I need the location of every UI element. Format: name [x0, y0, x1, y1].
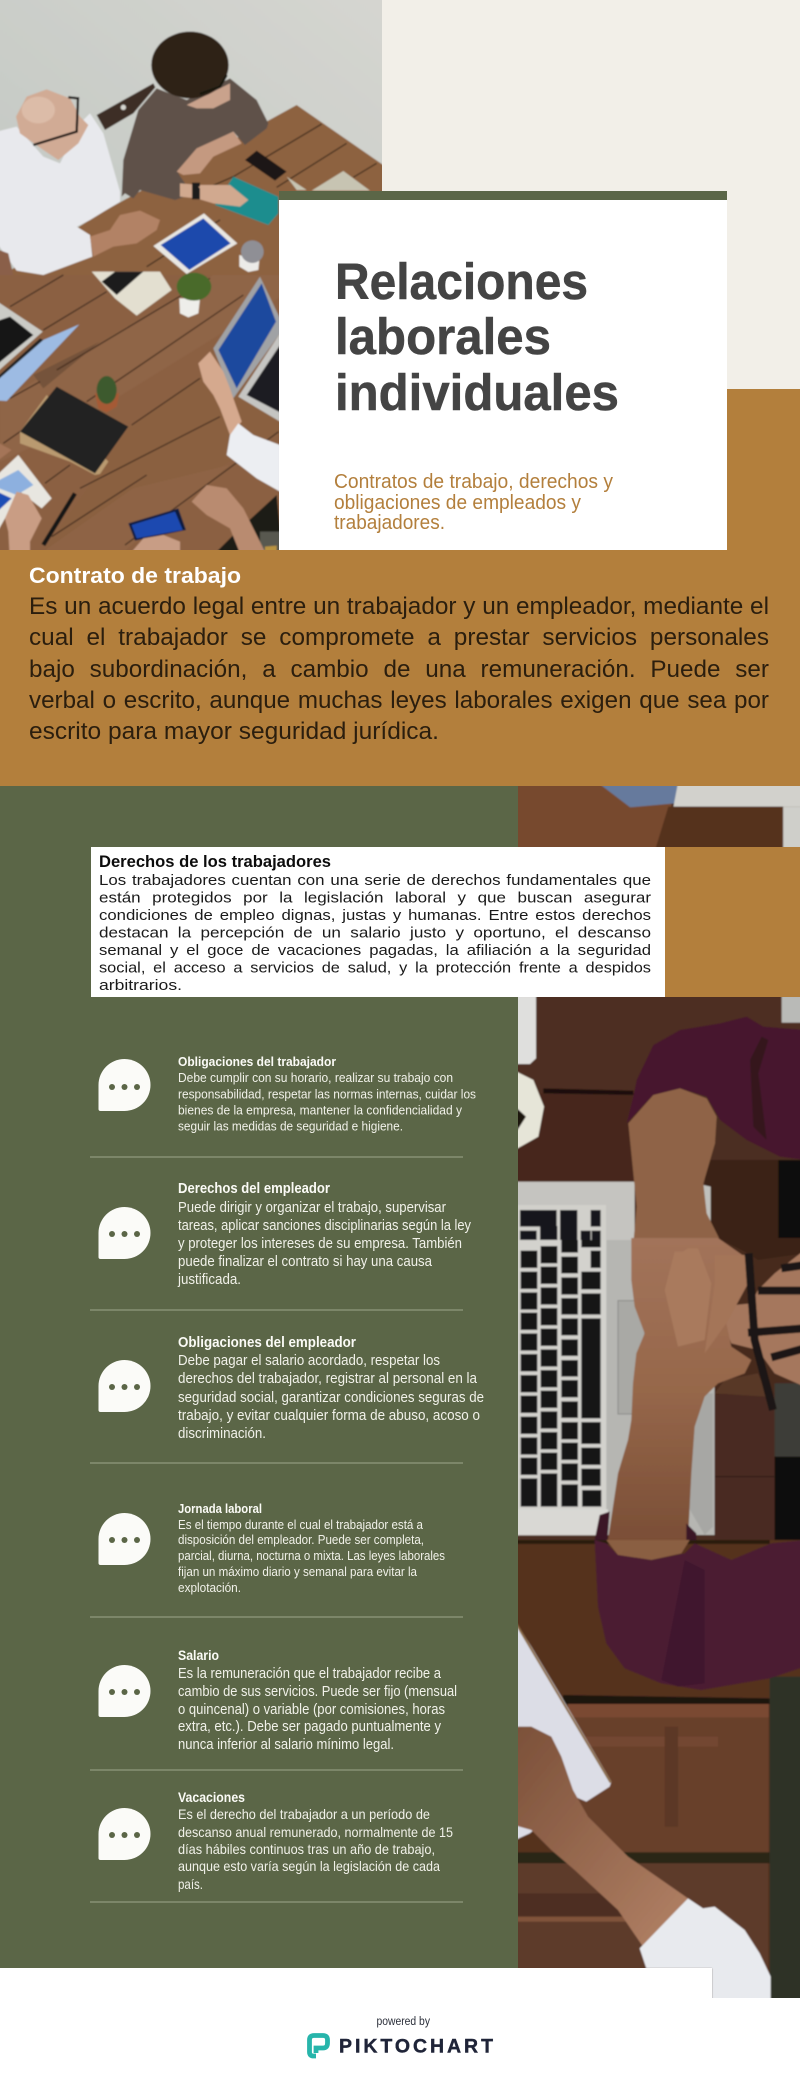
body text: responsabilidad, respetar las normas internas, cuidar los — [178, 1086, 476, 1102]
beige header panel — [382, 0, 800, 389]
sleeve cuffs — [595, 1512, 696, 1540]
icon: piktochart logo — [310, 2036, 328, 2056]
subtitle — [334, 471, 613, 534]
notebook with phone — [92, 272, 172, 316]
body text — [178, 1518, 445, 1595]
body text: días hábiles continuos tras un año de trabajo, — [178, 1841, 435, 1857]
icon: speech bubble — [98, 1207, 150, 1259]
title: Relaciones — [335, 253, 588, 310]
body text — [178, 1353, 484, 1442]
body text: discriminación. — [178, 1426, 266, 1442]
text block: contract definition: Es un acuerdo legal entre un trabajador y un empleador, mediante el — [29, 593, 769, 620]
body text: Debe cumplir con su horario, realizar su trabajo con — [178, 1070, 453, 1085]
body text: puede finalizar el contrato si hay una causa — [178, 1254, 433, 1270]
white footer panel — [0, 1968, 712, 2078]
heading: derechos de los trabajadores: Derechos de los trabajadores — [99, 853, 331, 871]
body text: derechos del trabajador, registrar al personal en la — [178, 1371, 478, 1387]
text block: rights description — [99, 872, 651, 994]
body text: Puede dirigir y organizar el trabajo, supervisar — [178, 1200, 446, 1216]
body text: tareas, aplicar sanciones disciplinarias según la ley — [178, 1218, 472, 1234]
body text: país. — [178, 1876, 203, 1892]
laptop top right — [287, 171, 370, 191]
panel: derechos de los trabajadores — [91, 847, 665, 997]
body text — [178, 1070, 476, 1134]
title: laborales — [335, 308, 551, 365]
photo: handshake over laptop on wooden desk — [500, 770, 800, 2015]
body text: justificada. — [177, 1272, 241, 1288]
icon: speech bubble — [98, 1513, 150, 1565]
body text: descanso anual remunerado, normalmente de 15 — [178, 1824, 453, 1840]
heading: Derechos del empleador — [178, 1181, 330, 1197]
teal notebook — [215, 177, 278, 225]
body text: explotación. — [178, 1581, 241, 1595]
dark floor and hand bottom right — [192, 484, 279, 550]
second person's face and hand — [725, 1250, 800, 1387]
subtitle: trabajadores. — [334, 512, 445, 534]
woman in brown shirt — [122, 32, 268, 207]
body text: aunque esto varía según la legislación de cada — [178, 1858, 440, 1874]
paper at top — [518, 997, 538, 1066]
plant in white pot — [177, 273, 211, 317]
item: obligaciones del trabajador — [98, 1054, 476, 1134]
arm with white sleeve — [198, 352, 280, 492]
text block: rights description: social, el acceso a servicios de salud, y la protección frente a despidos — [99, 960, 651, 976]
heading: contrato de trabajo: Contrato de trabajo — [29, 563, 241, 588]
white cuff — [640, 1898, 771, 2007]
heading: Obligaciones del empleador — [178, 1335, 356, 1351]
tablet and hands bottom left — [0, 444, 52, 550]
body text: parcial, diurna, nocturna o mixta. Las leyes laborales — [178, 1549, 445, 1563]
body text: nunca inferior al salario mínimo legal. — [178, 1737, 394, 1753]
heading: Jornada laboral — [178, 1502, 262, 1516]
footer: powered by piktochart — [310, 2016, 493, 2058]
maroon sleeve — [595, 1540, 800, 1690]
text block: rights description: están protegidos por la legislación laboral y que buscan asegurar — [99, 890, 651, 906]
photo: team meeting around wooden table — [0, 0, 400, 562]
title card — [279, 200, 727, 550]
wood and dark right side — [715, 1238, 800, 1540]
notebook — [508, 1610, 611, 1843]
front hand and forearm — [608, 1238, 751, 1540]
heading: Obligaciones del trabajador — [178, 1054, 336, 1069]
body text: seguir las medidas de seguridad e higiene. — [178, 1118, 403, 1134]
item: vacaciones — [98, 1790, 453, 1892]
text block: contract definition — [29, 593, 769, 745]
black book — [20, 387, 128, 475]
body text: bienes de la empresa, mantener la confidencialidad y — [178, 1102, 462, 1118]
cactus pot — [95, 376, 119, 412]
phone on table — [245, 151, 287, 181]
maroon sleeve — [627, 1017, 800, 1160]
tablet — [153, 213, 237, 274]
item: derechos del empleador — [98, 1181, 472, 1288]
text block: contract definition: escrito para mayor seguridad jurídica. — [29, 718, 439, 745]
panel: contrato de trabajo — [0, 550, 800, 786]
piktochart wordmark: PIKTOCHART — [339, 2036, 493, 2058]
text block: contract definition: verbal o escrito, aunque muchas leyes laborales exigen que sea por — [29, 687, 769, 714]
text block: contract definition: cual el trabajador se compromete a prestar servicios personales — [29, 624, 769, 651]
coffee mug — [518, 1071, 546, 1150]
title: individuales — [335, 364, 619, 421]
lower desk scene — [508, 1540, 800, 2007]
body text: Debe pagar el salario acordado, respetar los — [178, 1353, 440, 1369]
text block: rights description: semanal y el goce de vacaciones pagadas, la afiliación a la seguridad — [99, 942, 651, 959]
item: obligaciones del empleador — [98, 1335, 484, 1442]
tan band right of card — [727, 389, 800, 550]
green bar on card — [279, 191, 727, 200]
laptop deck top — [518, 1180, 636, 1241]
body text — [177, 1200, 472, 1288]
tan block behind rights box — [665, 847, 800, 997]
text block: rights description: Los trabajadores cuentan con una serie de derechos fundamentales que — [99, 872, 651, 889]
body text: Es el tiempo durante el cual el trabajador está a — [178, 1518, 423, 1532]
subtitle: Contratos de trabajo, derechos y — [334, 471, 613, 493]
upper desk scene — [518, 997, 800, 1242]
body text: seguridad social, garantizar condiciones seguras de — [178, 1390, 484, 1406]
icon: speech bubble — [98, 1360, 150, 1412]
forearm top — [606, 1540, 690, 1560]
laptop on left — [0, 297, 79, 401]
text block: rights description: arbitrarios. — [99, 977, 182, 994]
body text — [178, 1666, 457, 1753]
powered by label: powered by — [376, 2016, 430, 2028]
text block: rights description: condiciones de empleo dignas, justas y humanas. Entre estos derechos — [99, 907, 651, 924]
laptop on right — [213, 277, 280, 422]
icon: speech bubble — [98, 1665, 150, 1717]
keys top — [519, 1209, 602, 1242]
laptop and clasped hands — [508, 1238, 800, 1540]
writing arm — [508, 1727, 688, 1947]
phone with blue screen — [128, 508, 186, 541]
table top — [11, 104, 382, 276]
green background panel — [0, 786, 518, 1968]
table bottom — [0, 275, 283, 562]
bald man in white shirt — [0, 89, 160, 275]
body text — [178, 1806, 453, 1892]
body text: Es el derecho del trabajador a un período de — [178, 1806, 430, 1822]
keyboard keys — [521, 1240, 601, 1507]
body text: cambio de sus servicios. Puede ser fijo (mensual — [178, 1684, 457, 1700]
heading: Vacaciones — [178, 1790, 245, 1805]
succulent pot — [239, 240, 264, 272]
icon: speech bubble — [98, 1808, 150, 1860]
body text: trabajo, y evitar cualquier forma de abuso, acoso o — [178, 1408, 480, 1424]
body text: Es la remuneración que el trabajador recibe a — [178, 1666, 442, 1682]
item: jornada laboral — [98, 1502, 445, 1595]
chair — [97, 83, 155, 130]
title — [335, 253, 619, 421]
text block: rights description: destacan la percepción de un salario justo y oportuno, el descanso — [99, 924, 651, 942]
body text: y proteger los intereses de su empresa. También — [178, 1236, 462, 1252]
icon: speech bubble — [98, 1059, 150, 1111]
forearm upper — [628, 1088, 720, 1239]
glasses — [748, 1253, 800, 1410]
heading: Salario — [178, 1647, 219, 1663]
laptop deck — [508, 1240, 800, 1540]
subtitle: obligaciones de empleados y — [334, 492, 581, 514]
text block: contract definition: bajo subordinación, a cambio de una remuneración. Puede ser — [29, 656, 769, 683]
body text: fijan un máximo diario y semanal para evitar la — [178, 1565, 417, 1579]
body text: disposición del empleador. Puede ser completa, — [178, 1533, 424, 1547]
item: salario — [98, 1647, 457, 1753]
body text: extra, etc.). Debe ser pagado puntualmente y — [178, 1719, 442, 1735]
body text: o quincenal) o variable (por comisiones, horas — [178, 1702, 445, 1718]
